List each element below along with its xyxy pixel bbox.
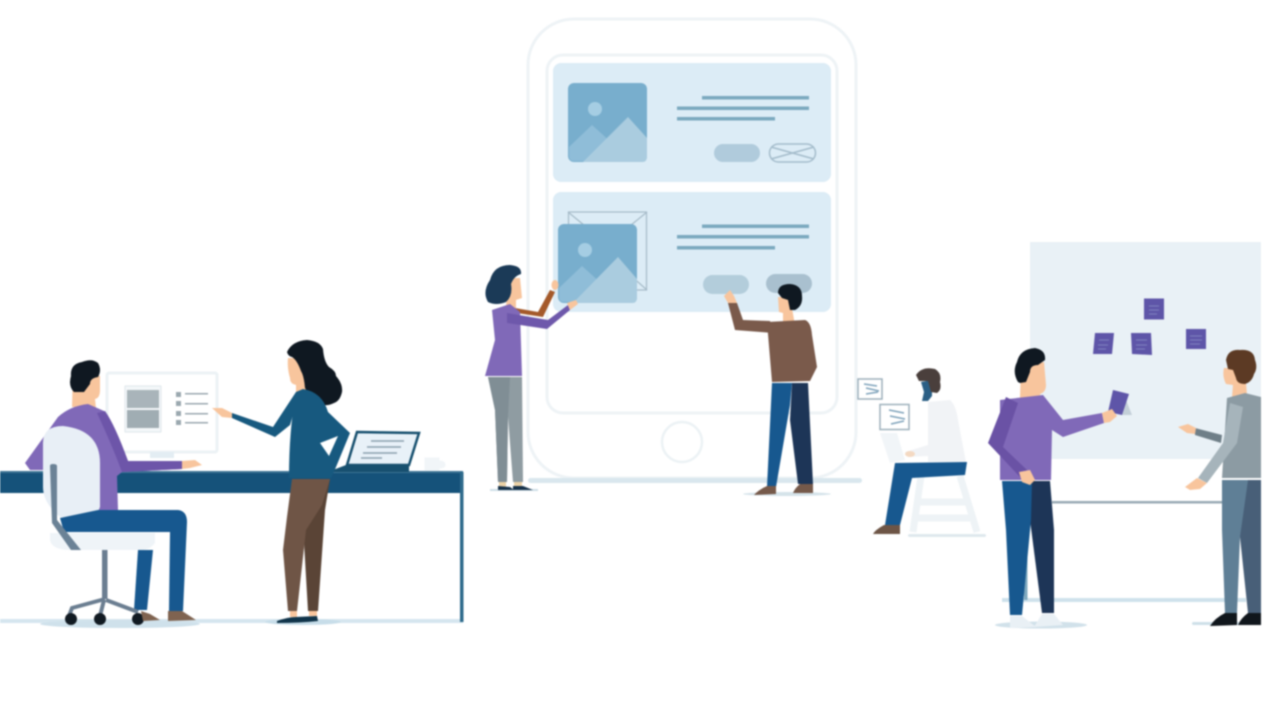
floor line [0, 619, 463, 623]
hair [916, 368, 941, 393]
floor shadow [995, 622, 1087, 628]
dragged image placeholder [558, 224, 637, 303]
face [288, 358, 308, 396]
phone body [528, 19, 856, 478]
floor shadow [265, 619, 341, 625]
shoe front [754, 486, 776, 495]
scene: phone mockup [528, 19, 862, 483]
hair [70, 360, 100, 392]
hair [1226, 350, 1256, 384]
rear leg [1030, 481, 1054, 613]
beard and face [921, 380, 932, 401]
board rail [1052, 501, 1227, 504]
shoe rear [1238, 613, 1261, 625]
front arm [507, 305, 570, 329]
hand pointing [212, 408, 232, 418]
coffee cup [425, 458, 445, 470]
front hand [567, 300, 578, 310]
ankles [499, 482, 522, 487]
card 1 [553, 63, 831, 182]
shoe rear [793, 484, 813, 493]
trouser shading [488, 377, 510, 482]
arm pointing [232, 392, 300, 437]
sweater [1000, 395, 1104, 480]
face and neck [1223, 368, 1247, 397]
stool shadow [908, 534, 986, 537]
sticky note 2 [1093, 333, 1114, 354]
floating card 1 [858, 379, 882, 399]
chair back [43, 426, 100, 517]
card 2 [553, 192, 831, 312]
floor shadow [743, 492, 831, 496]
person: man in grey [1178, 350, 1261, 626]
shoe [873, 525, 900, 534]
hand [905, 451, 915, 457]
face and neck [778, 297, 795, 325]
hair [485, 265, 521, 304]
home button [662, 422, 702, 462]
text lines 2 [677, 224, 809, 250]
hair [1015, 348, 1045, 383]
scene: desk with seated man and standing woman [0, 340, 464, 628]
hand raised [724, 290, 737, 303]
shoes [498, 486, 533, 490]
chair seat [50, 533, 155, 550]
chair arm [50, 464, 81, 550]
front leg [283, 479, 330, 611]
shoes [1010, 614, 1063, 628]
ankles [290, 611, 317, 617]
note shadow flag [1121, 400, 1132, 415]
laptop [333, 432, 419, 472]
front arm [1198, 403, 1243, 483]
back hand [552, 280, 558, 290]
phone screen [547, 55, 837, 413]
wireframe button [770, 144, 816, 162]
shoes [277, 616, 318, 623]
sweater [767, 320, 817, 382]
image placeholder 1 [568, 83, 647, 162]
seated man [25, 360, 202, 625]
chair pole [102, 550, 108, 599]
monitor [107, 373, 217, 458]
teal top [289, 389, 350, 478]
stool [913, 476, 977, 532]
floor line [1002, 598, 1246, 602]
trousers front [1222, 480, 1248, 613]
desk [0, 471, 464, 622]
face [506, 278, 522, 308]
sticky note 4 [1186, 329, 1206, 349]
thigh and shin [60, 510, 187, 611]
person: seated man with laptop [858, 368, 986, 537]
rear leg [790, 383, 813, 484]
button 2 [703, 275, 749, 294]
back hand [1178, 424, 1196, 434]
wheel 2 [94, 613, 106, 625]
trousers rear [1240, 480, 1261, 613]
hair [287, 340, 342, 405]
person: man pressing button [724, 284, 831, 496]
button 1 [714, 144, 760, 162]
front leg [767, 383, 792, 487]
sticky note 3 [1131, 333, 1152, 355]
floor shadow [1192, 622, 1242, 625]
legs [885, 462, 967, 525]
trousers [488, 377, 523, 482]
front hand [1185, 478, 1207, 490]
back leg [303, 479, 330, 611]
folded arm [988, 397, 1027, 477]
white shirt [928, 400, 966, 462]
standing woman [212, 340, 350, 625]
sticky note 1 [1144, 298, 1164, 320]
purple jacket [485, 304, 522, 376]
scene: whiteboard [1002, 242, 1261, 602]
person: man in purple with sticky note [988, 348, 1132, 628]
hidden leg [134, 550, 153, 610]
held sticky note [1108, 390, 1129, 415]
wheel 1 [65, 613, 77, 625]
shoe right [168, 611, 196, 621]
sleeve shading [97, 411, 182, 472]
chair shadow [40, 620, 200, 628]
wheel 3 [132, 613, 144, 625]
laptop [880, 433, 905, 463]
button 3 [766, 274, 812, 293]
hand behind back [1019, 470, 1035, 485]
hand holding note [1102, 409, 1117, 423]
board [1030, 242, 1261, 459]
back arm [1195, 428, 1222, 443]
shoe left [141, 611, 160, 621]
wireframe image outline [568, 212, 647, 290]
purple sweater [25, 404, 182, 510]
hand on keyboard [182, 460, 202, 469]
text lines 1 [677, 96, 809, 120]
front leg [1002, 481, 1032, 615]
person: woman moving image [485, 265, 578, 491]
face and neck [1020, 362, 1046, 398]
board leg [1024, 530, 1028, 600]
hair [778, 284, 802, 310]
chair base [69, 599, 138, 616]
shoe front [1210, 613, 1237, 626]
back arm [515, 290, 555, 317]
floating card 2 [880, 404, 909, 430]
grey sweater [1222, 393, 1261, 478]
arm [905, 445, 928, 457]
phone floor shadow [528, 478, 862, 483]
floor shadow [490, 489, 538, 491]
neck and face [72, 372, 100, 408]
arm raised [728, 303, 773, 333]
